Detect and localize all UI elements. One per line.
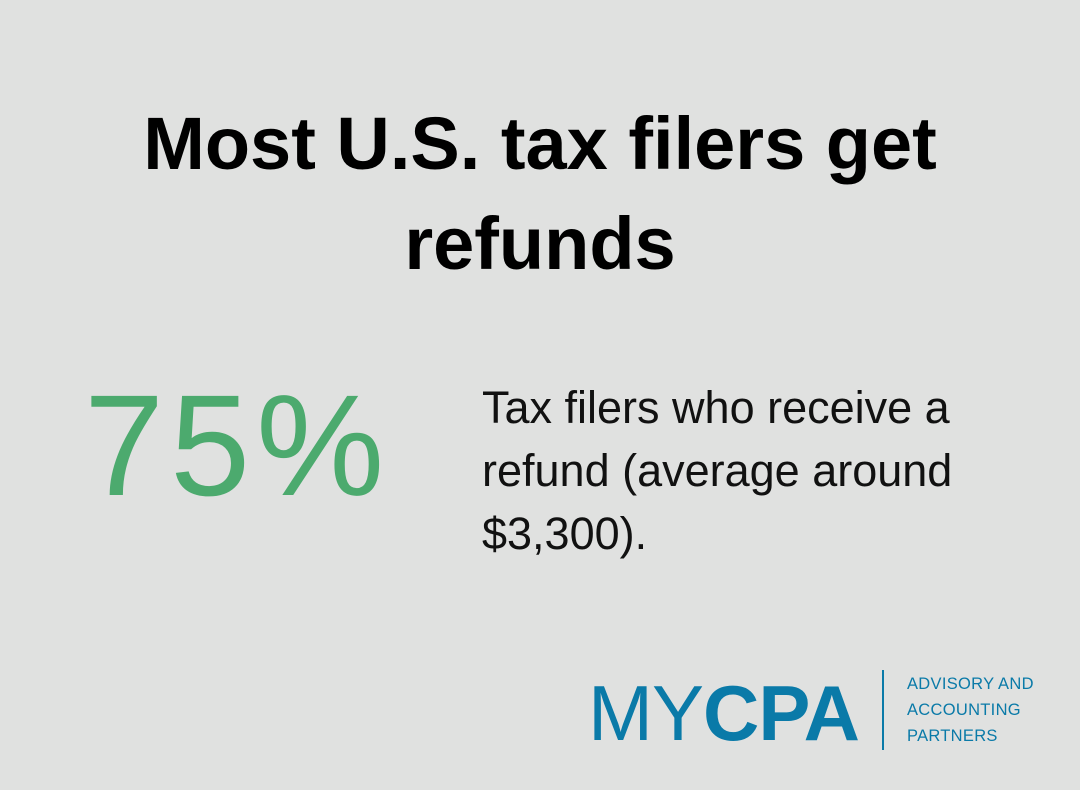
logo tagline: ADVISORY AND (907, 675, 1034, 693)
stat description: Tax filers who receive a (482, 382, 950, 433)
stat description: $3,300). (482, 508, 647, 559)
logo tagline (907, 675, 1034, 745)
stat description: refund (average around (482, 445, 952, 496)
logo (588, 669, 1034, 757)
title: Most U.S. tax filers get (143, 102, 937, 185)
logo wordmark: MYCPA (588, 669, 859, 757)
logo tagline: PARTNERS (907, 727, 998, 745)
stat number: 75% (84, 365, 390, 526)
title: refunds (404, 202, 676, 285)
stat description (482, 382, 952, 559)
title (143, 102, 937, 285)
logo tagline: ACCOUNTING (907, 701, 1021, 719)
